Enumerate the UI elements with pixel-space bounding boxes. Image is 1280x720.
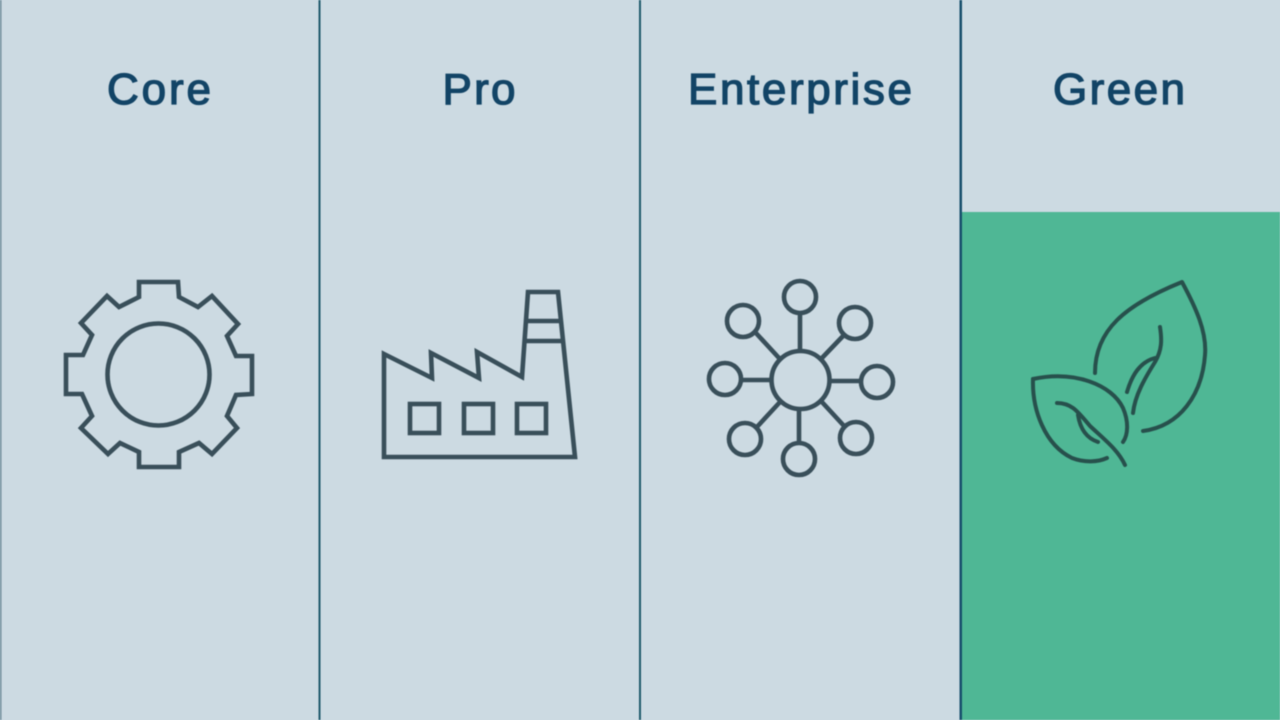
icon: network hub [709, 281, 893, 475]
panel: Pro [321, 0, 639, 720]
green highlight block [962, 212, 1280, 720]
heading: Pro: Pro [442, 65, 516, 114]
panel: Enterprise [641, 0, 959, 720]
icon: gear [66, 282, 252, 467]
heading: Enterprise: Enterprise [688, 65, 912, 114]
heading: Core: Core [107, 65, 211, 114]
panel: Core [1, 0, 319, 720]
heading: Green: Green [1053, 65, 1185, 114]
panel: Green [961, 0, 1280, 720]
icon: leaves [1033, 282, 1205, 465]
column dividers [0, 0, 962, 720]
icon: factory [384, 292, 575, 457]
